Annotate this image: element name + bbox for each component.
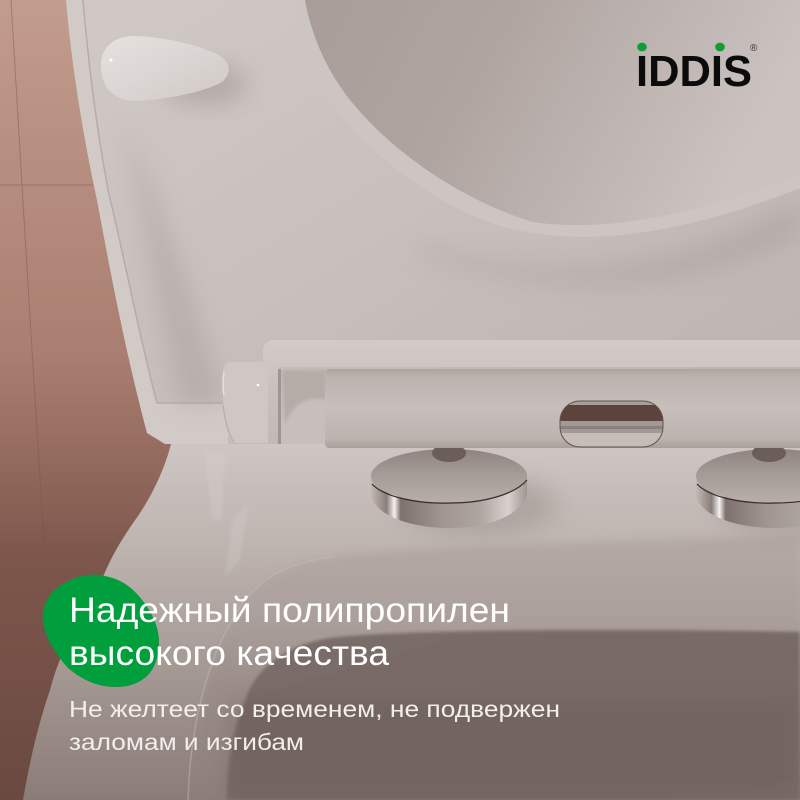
heading: Надежный полипропилен [69, 591, 510, 630]
lid opening [305, 0, 800, 225]
logo green dots [637, 43, 725, 51]
hinge knuckle [223, 362, 268, 443]
lid opening lip [295, 0, 800, 237]
heading: высокого качества [69, 634, 390, 673]
green blob [43, 575, 159, 687]
hinge recess [278, 369, 326, 444]
body text: заломам и изгибам [69, 729, 304, 755]
logo: IDDIS: IDDIS [636, 47, 752, 96]
body text [69, 696, 560, 755]
hinge cylinder [325, 369, 800, 448]
bowl inner rim [190, 535, 800, 800]
registered mark: ® [750, 43, 758, 54]
lid rim [66, 0, 228, 444]
heading [69, 591, 510, 673]
chrome disc right [696, 444, 800, 533]
chrome disc left [371, 444, 558, 533]
body text: Не желтеет со временем, не подвержен [69, 696, 560, 722]
bowl interior [227, 630, 800, 800]
chrome slot [560, 401, 663, 447]
hinge top band [263, 340, 800, 443]
peg bumper [101, 36, 247, 104]
seat lid [66, 0, 800, 444]
toilet bowl [23, 440, 800, 800]
hinge bar [223, 340, 800, 448]
